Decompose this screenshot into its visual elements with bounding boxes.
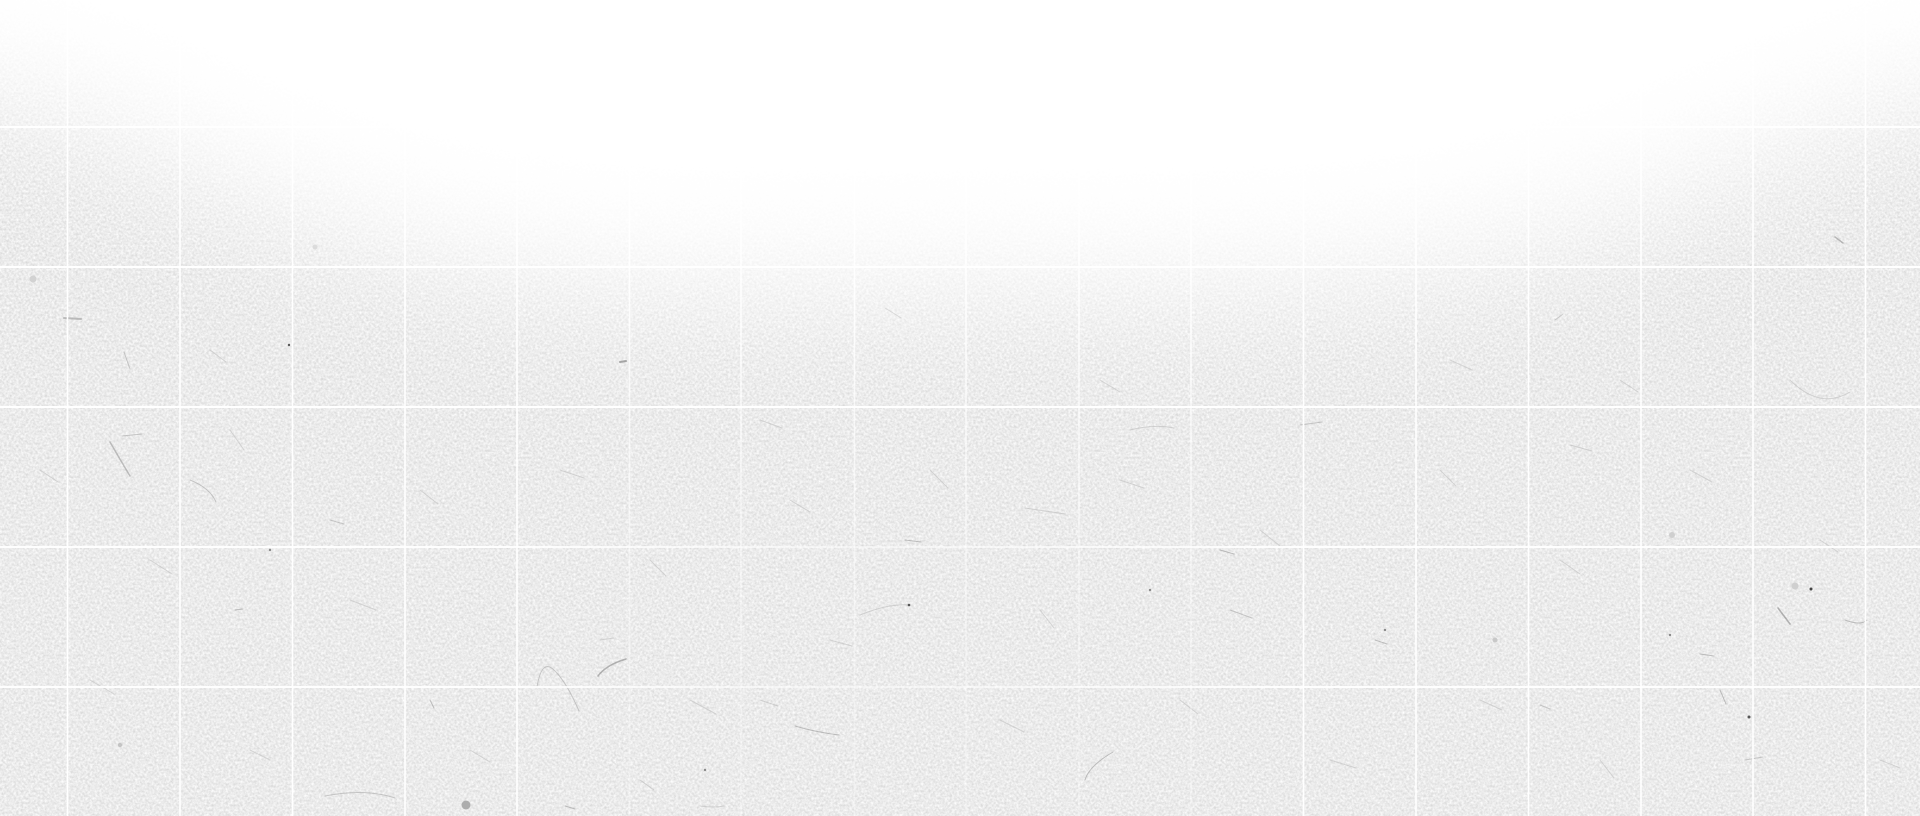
top white fade [0,0,1920,290]
paper fibres and specks [64,237,1867,809]
faint paper fibres [40,350,1900,778]
